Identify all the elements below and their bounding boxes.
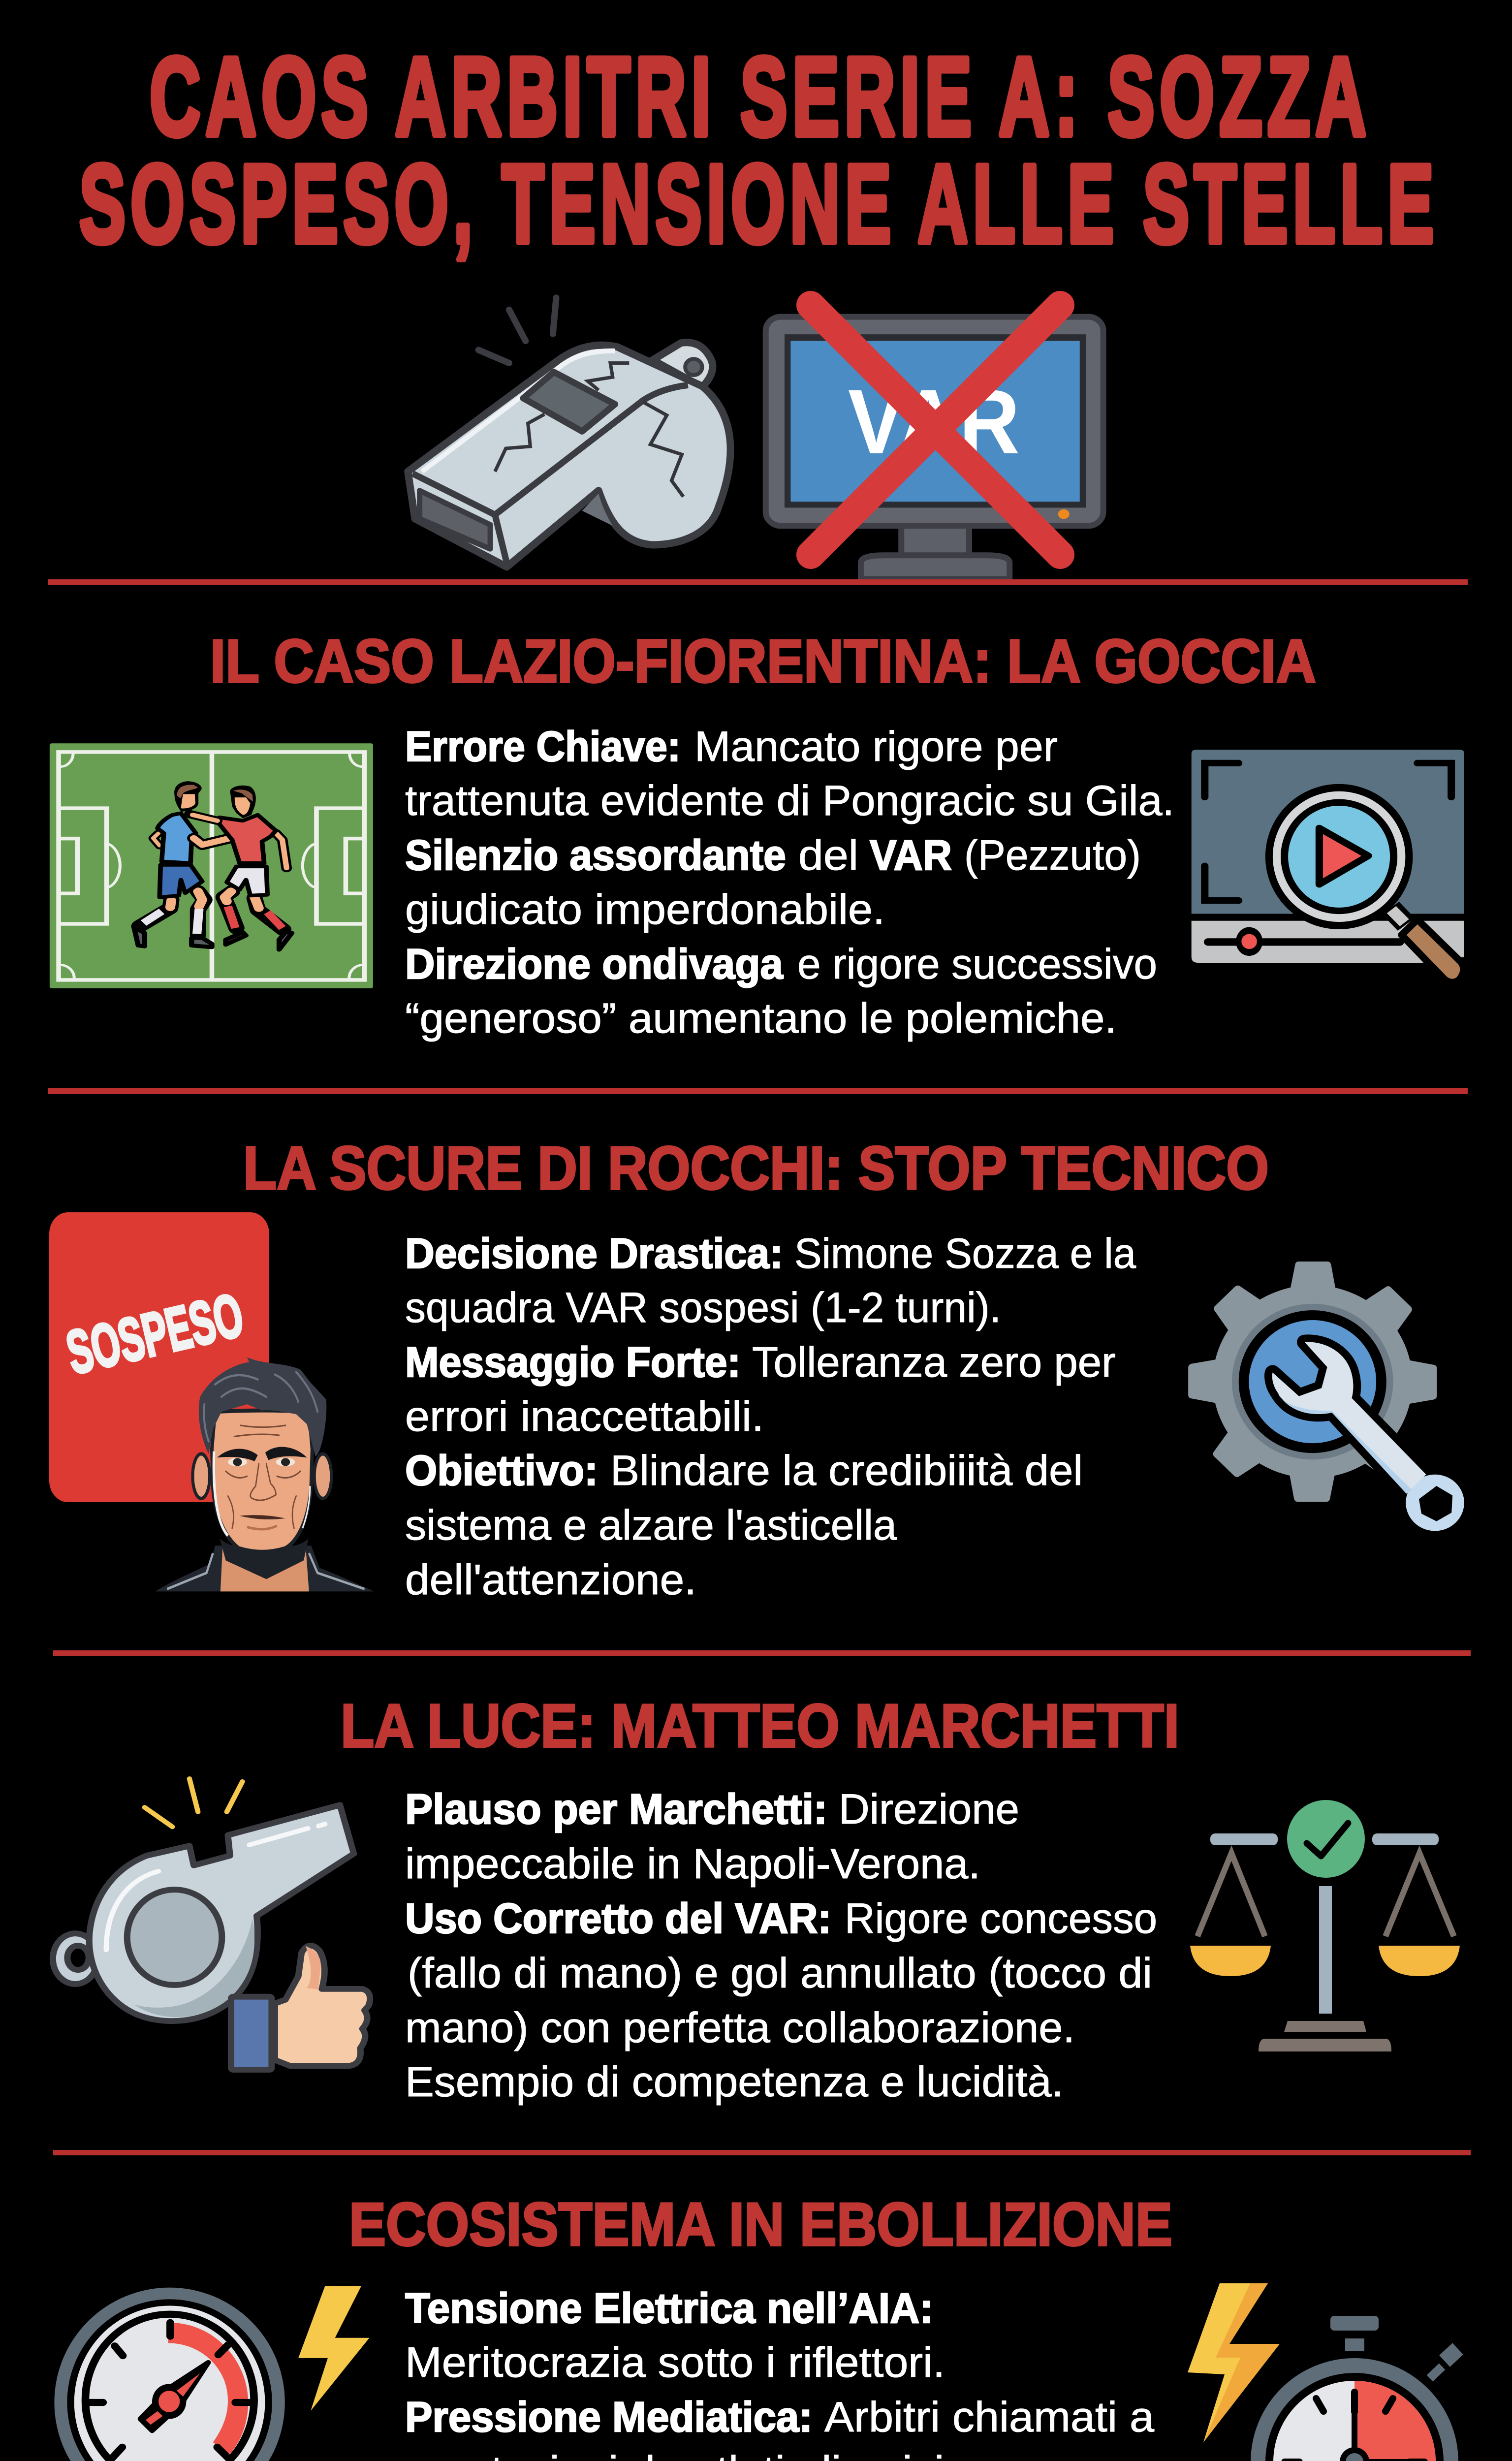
text block: impeccabile in Napoli-Verona. <box>405 1840 980 1888</box>
text block <box>405 2285 1154 2461</box>
text block: Errore Chiave: <box>405 723 681 770</box>
text block: Arbitri chiamati a <box>824 2394 1154 2441</box>
icon: cracked whistle <box>408 298 730 567</box>
text block: Tensione Elettrica nell’AIA: <box>405 2285 933 2332</box>
text block: “generoso” aumentano le polemiche. <box>405 995 1117 1042</box>
icon: red card: SOSPESO <box>61 1281 250 1387</box>
text block: (Pezzuto) <box>964 832 1141 879</box>
text block: sistema e alzare l'asticella <box>405 1502 897 1549</box>
panel: Lazio-Fiorentina <box>50 628 1464 1042</box>
text block: del <box>798 832 858 879</box>
heading: LA LUCE: MATTEO MARCHETTI <box>341 1692 1179 1760</box>
text block: e rigore successivo <box>797 941 1157 988</box>
title <box>79 34 1439 266</box>
text block: Uso Corretto del VAR: <box>405 1895 831 1942</box>
icon: pressure gauge with bolts <box>54 2286 370 2461</box>
text block: Pressione Mediatica: <box>405 2394 813 2441</box>
text block: errori inaccettabili. <box>405 1393 764 1440</box>
icon: VAR monitor crossed out: VAR <box>848 371 1020 473</box>
heading: IL CASO LAZIO-FIORENTINA: LA GOCCIA <box>210 628 1316 695</box>
icon: whistle with thumbs up <box>53 1779 370 2070</box>
text block: Tolleranza zero per <box>752 1339 1116 1386</box>
text block: trattenuta evidente di Pongracic su Gila. <box>405 777 1174 824</box>
text block: dell'attenzione. <box>405 1556 696 1604</box>
text block: Direzione <box>839 1786 1019 1833</box>
heading: LA SCURE DI ROCCHI: STOP TECNICO <box>243 1135 1269 1202</box>
heading: ECOSISTEMA IN EBOLLIZIONE <box>349 2191 1172 2259</box>
text block: Meritocrazia sotto i riflettori. <box>405 2339 945 2386</box>
panel: Rocchi <box>49 1135 1464 1604</box>
text block <box>405 1230 1136 1604</box>
icon: gear and wrench <box>1188 1262 1464 1531</box>
text block: Direzione ondivaga <box>405 941 784 988</box>
icon: player in red <box>189 786 292 949</box>
text block <box>405 1786 1157 2106</box>
text block: Plauso per Marchetti: <box>405 1786 827 1833</box>
icon: football pitch with players <box>50 743 373 988</box>
text block: Blindare la credibiiità del <box>610 1447 1083 1494</box>
icon: player in blue <box>134 781 230 947</box>
icon: balance scales with check <box>1190 1800 1460 2051</box>
panel: Ecosistema <box>54 2191 1458 2461</box>
text block: VAR <box>870 832 952 879</box>
text block: Messaggio Forte: <box>405 1339 741 1386</box>
icon: stopwatch with bolt <box>1188 2283 1458 2461</box>
text block: Silenzio assordante <box>405 832 786 879</box>
text block: Esempio di competenza e lucidità. <box>405 2058 1064 2106</box>
panel: Marchetti <box>53 1692 1460 2106</box>
text block: Obiettivo: <box>405 1447 598 1494</box>
icon: red card <box>49 1212 269 1502</box>
icon: VAR monitor crossed out <box>766 305 1103 579</box>
text block: Mancato rigore per <box>694 723 1058 770</box>
icon: video review magnifier <box>1192 750 1464 982</box>
text block: mano) con perfetta collaborazione. <box>405 2004 1075 2051</box>
text block: Decisione Drastica: <box>405 1230 783 1277</box>
text block: Rigore concesso <box>845 1895 1157 1942</box>
icon: referee portrait <box>156 1357 374 1591</box>
text block: squadra VAR sospesi (1-2 turni). <box>405 1284 1001 1331</box>
text block: Simone Sozza e la <box>794 1230 1136 1277</box>
text block: giudicato imperdonabile. <box>405 886 885 933</box>
text block <box>405 723 1174 1042</box>
text block: (fallo di mano) e gol annullato (tocco di <box>408 1950 1152 1997</box>
